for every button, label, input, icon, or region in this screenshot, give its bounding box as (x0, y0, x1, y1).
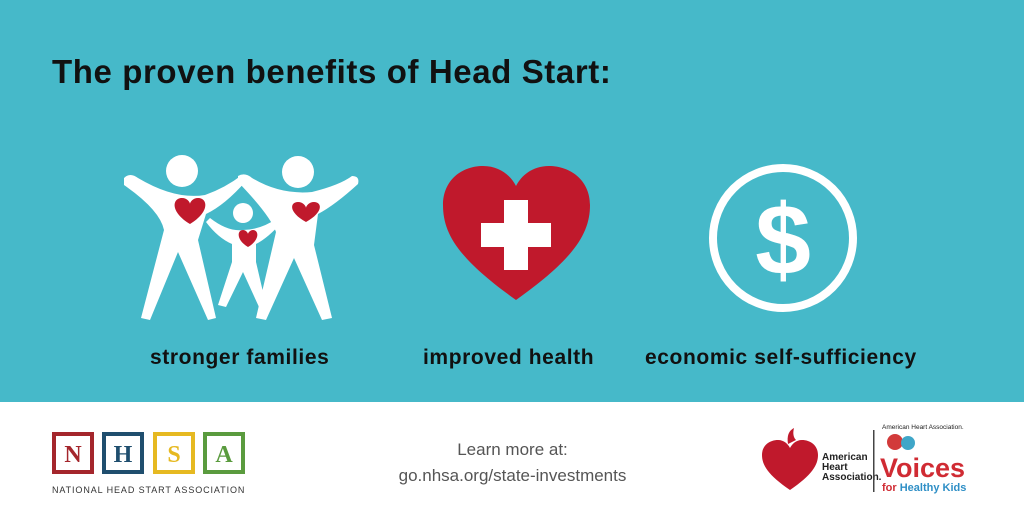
text: learn more (399, 440, 626, 485)
logo: NHSA: H (114, 442, 133, 468)
label: economic self-sufficiency: economic self-sufficiency (645, 346, 917, 369)
logo: AHA and Voices: Heart (822, 462, 848, 473)
logo: AHA and Voices: Voices (880, 453, 965, 483)
logo: NHSA: NATIONAL HEAD START ASSOCIATION (52, 485, 245, 495)
logo: AHA and Voices: American Heart Association. (882, 424, 964, 431)
logo: NHSA: S (167, 442, 181, 468)
text: learn more: go.nhsa.org/state-investments (399, 466, 626, 485)
teal banner (0, 0, 1024, 402)
logo: NHSA (52, 432, 245, 495)
logo: AHA and Voices: Association. (822, 472, 882, 483)
logo: AHA and Voices (762, 424, 966, 494)
icon: heart with cross (443, 166, 590, 300)
logo: NHSA: A (215, 442, 233, 468)
logo: AHA and Voices: for Healthy Kids (882, 482, 966, 494)
label: improved health: improved health (423, 346, 594, 369)
icon: dollar (713, 168, 853, 308)
text: learn more: Learn more at: (457, 440, 568, 459)
title: The proven benefits of Head Start: (52, 53, 611, 90)
icon: family (124, 155, 857, 320)
logo: NHSA: N (64, 442, 82, 468)
label: stronger families: stronger families (150, 346, 329, 369)
logo: AHA and Voices: American (822, 452, 868, 463)
icon: dollar: $ (755, 184, 811, 296)
